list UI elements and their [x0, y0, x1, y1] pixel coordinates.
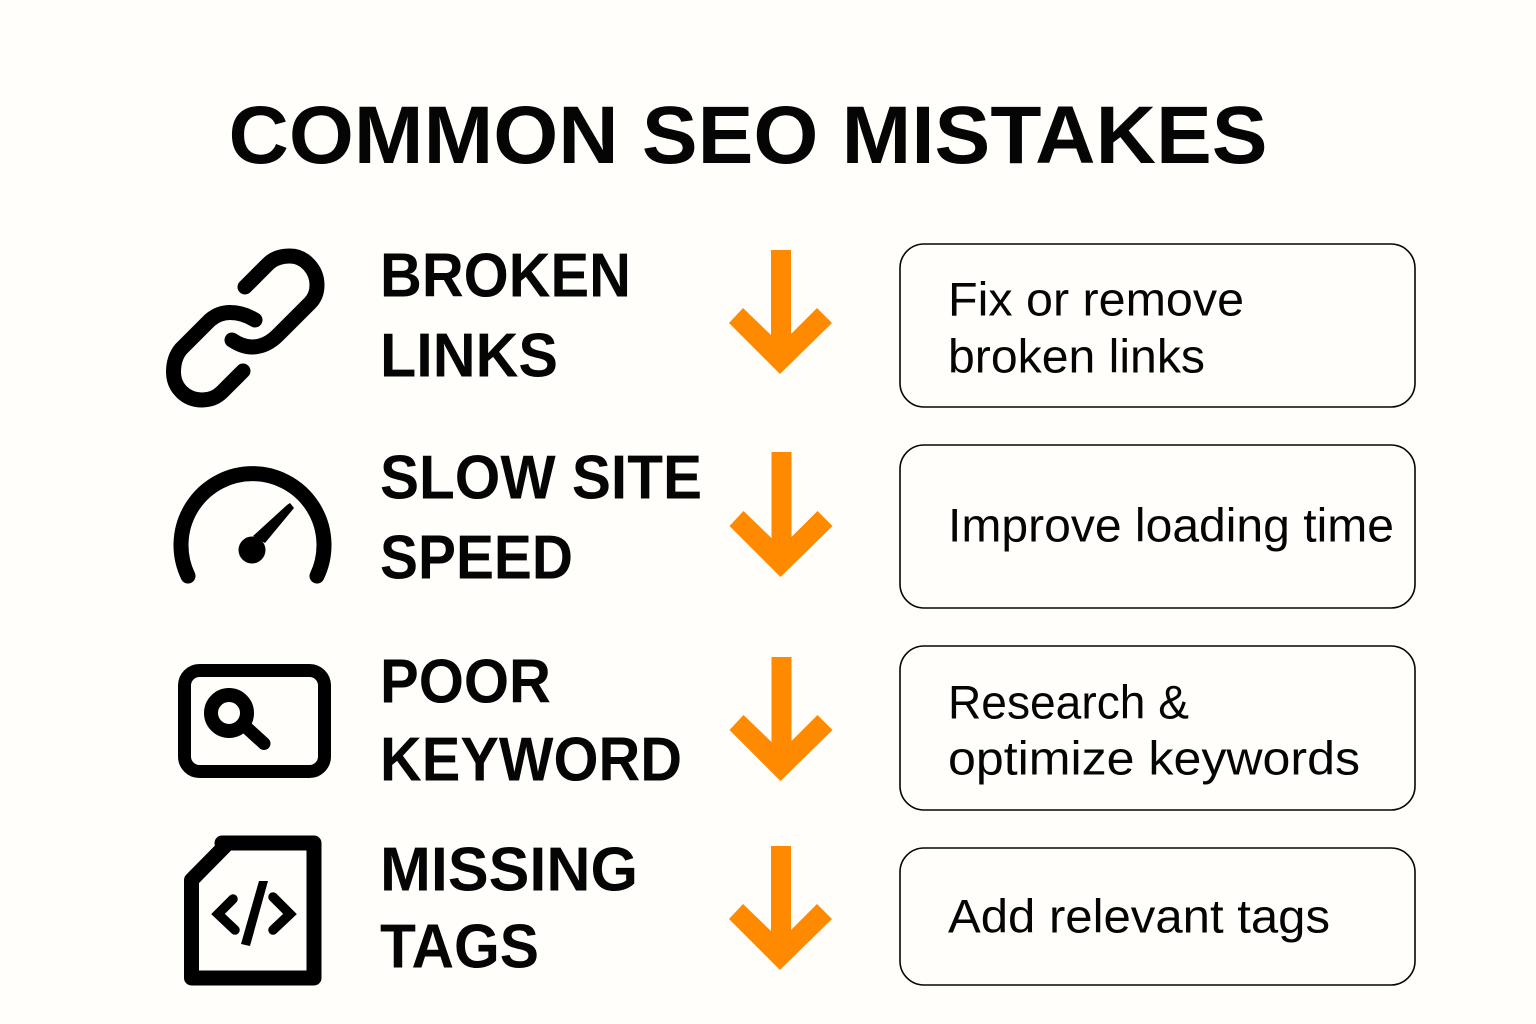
icon: chain link [174, 256, 317, 400]
solution box: fix links: Fix or remove [948, 272, 1244, 326]
solution box: fix links: broken links [948, 330, 1205, 382]
solution box: tags [900, 848, 1415, 985]
arrow [729, 250, 832, 374]
row: slow site speed [181, 444, 1415, 608]
solution box: keywords [900, 646, 1415, 810]
heading: poor keyword [380, 648, 682, 794]
heading: slow site speed [380, 444, 702, 592]
row: missing tags [192, 836, 1415, 985]
heading: poor keyword: KEYWORD [380, 726, 682, 794]
icon: speedometer [181, 474, 324, 576]
heading: slow site speed: SPEED [380, 524, 573, 592]
heading: slow site speed: SLOW SITE [380, 444, 702, 512]
solution box: loading time [900, 445, 1415, 608]
row: broken links [174, 242, 1415, 407]
icon: search box [184, 670, 324, 772]
heading: broken links [380, 242, 631, 390]
solution box: keywords: optimize keywords [948, 732, 1360, 784]
row: poor keyword [184, 646, 1415, 810]
heading: missing tags: TAGS [380, 912, 539, 982]
arrow [730, 657, 832, 781]
heading: missing tags [380, 836, 638, 982]
solution box: fix links [900, 244, 1415, 407]
solution box: loading time: Improve loading time [948, 498, 1394, 552]
heading: missing tags: MISSING [380, 836, 638, 904]
arrow [729, 846, 832, 970]
heading: broken links: BROKEN [380, 242, 631, 310]
solution box: tags: Add relevant tags [948, 890, 1330, 942]
icon: code document [192, 843, 314, 978]
arrow [730, 452, 832, 577]
title: COMMON SEO MISTAKES [228, 90, 1268, 181]
heading: broken links: LINKS [380, 322, 558, 390]
heading: poor keyword: POOR [380, 648, 551, 716]
solution box: keywords: Research & [948, 676, 1189, 728]
